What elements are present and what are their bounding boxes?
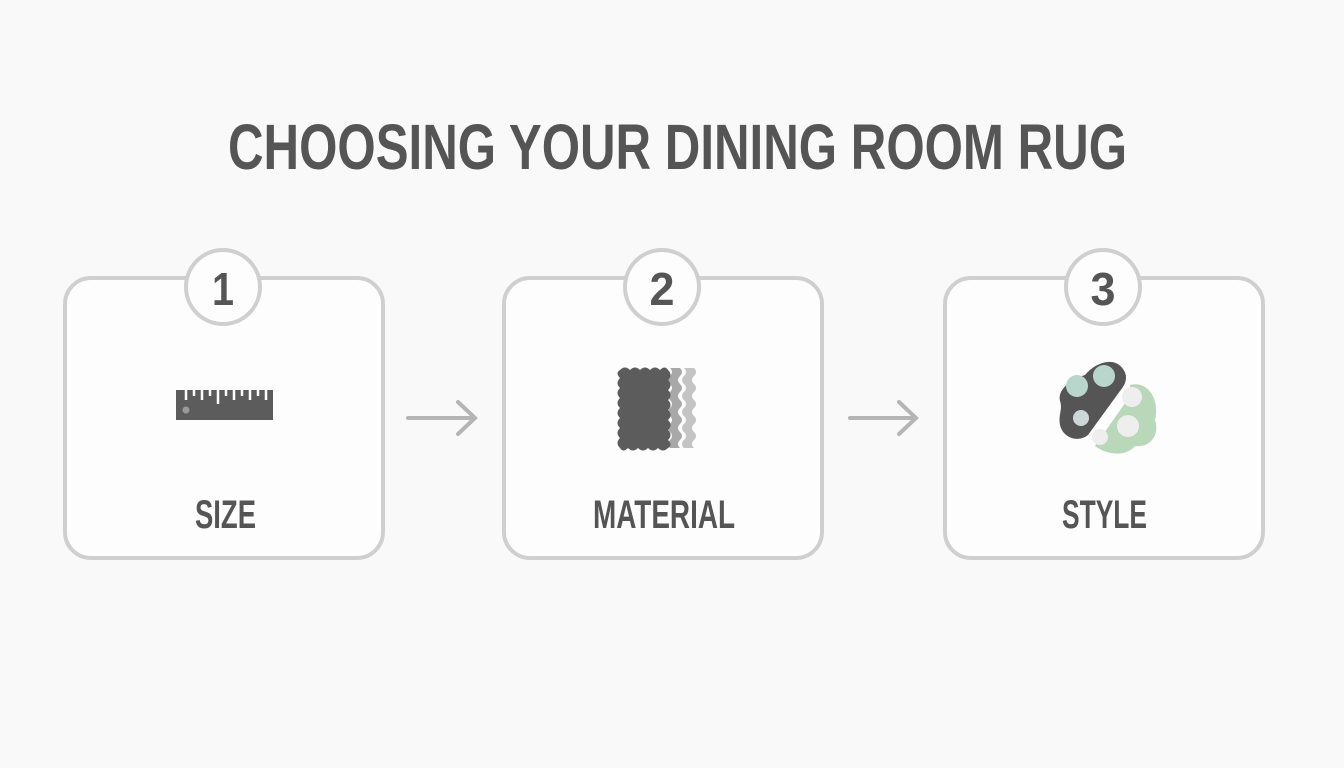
label: size: SIZE [195,493,256,537]
icon: ruler [176,390,273,420]
step badge 3: 3 [1090,263,1116,315]
icon: color palette [1060,362,1156,454]
arrow 1 [408,402,475,434]
step badge 1 [186,250,260,324]
step badge 3 [1066,250,1140,324]
panel: material [504,250,822,558]
panel: size [65,250,383,558]
arrow 2 [850,402,916,434]
step badge 2: 2 [650,263,674,315]
icon: fabric swatches [618,368,696,450]
label: material: MATERIAL [593,493,735,537]
panel: style [945,250,1263,558]
step badge 1: 1 [212,263,234,315]
label: style: STYLE [1062,493,1147,537]
step badge 2 [625,250,699,324]
